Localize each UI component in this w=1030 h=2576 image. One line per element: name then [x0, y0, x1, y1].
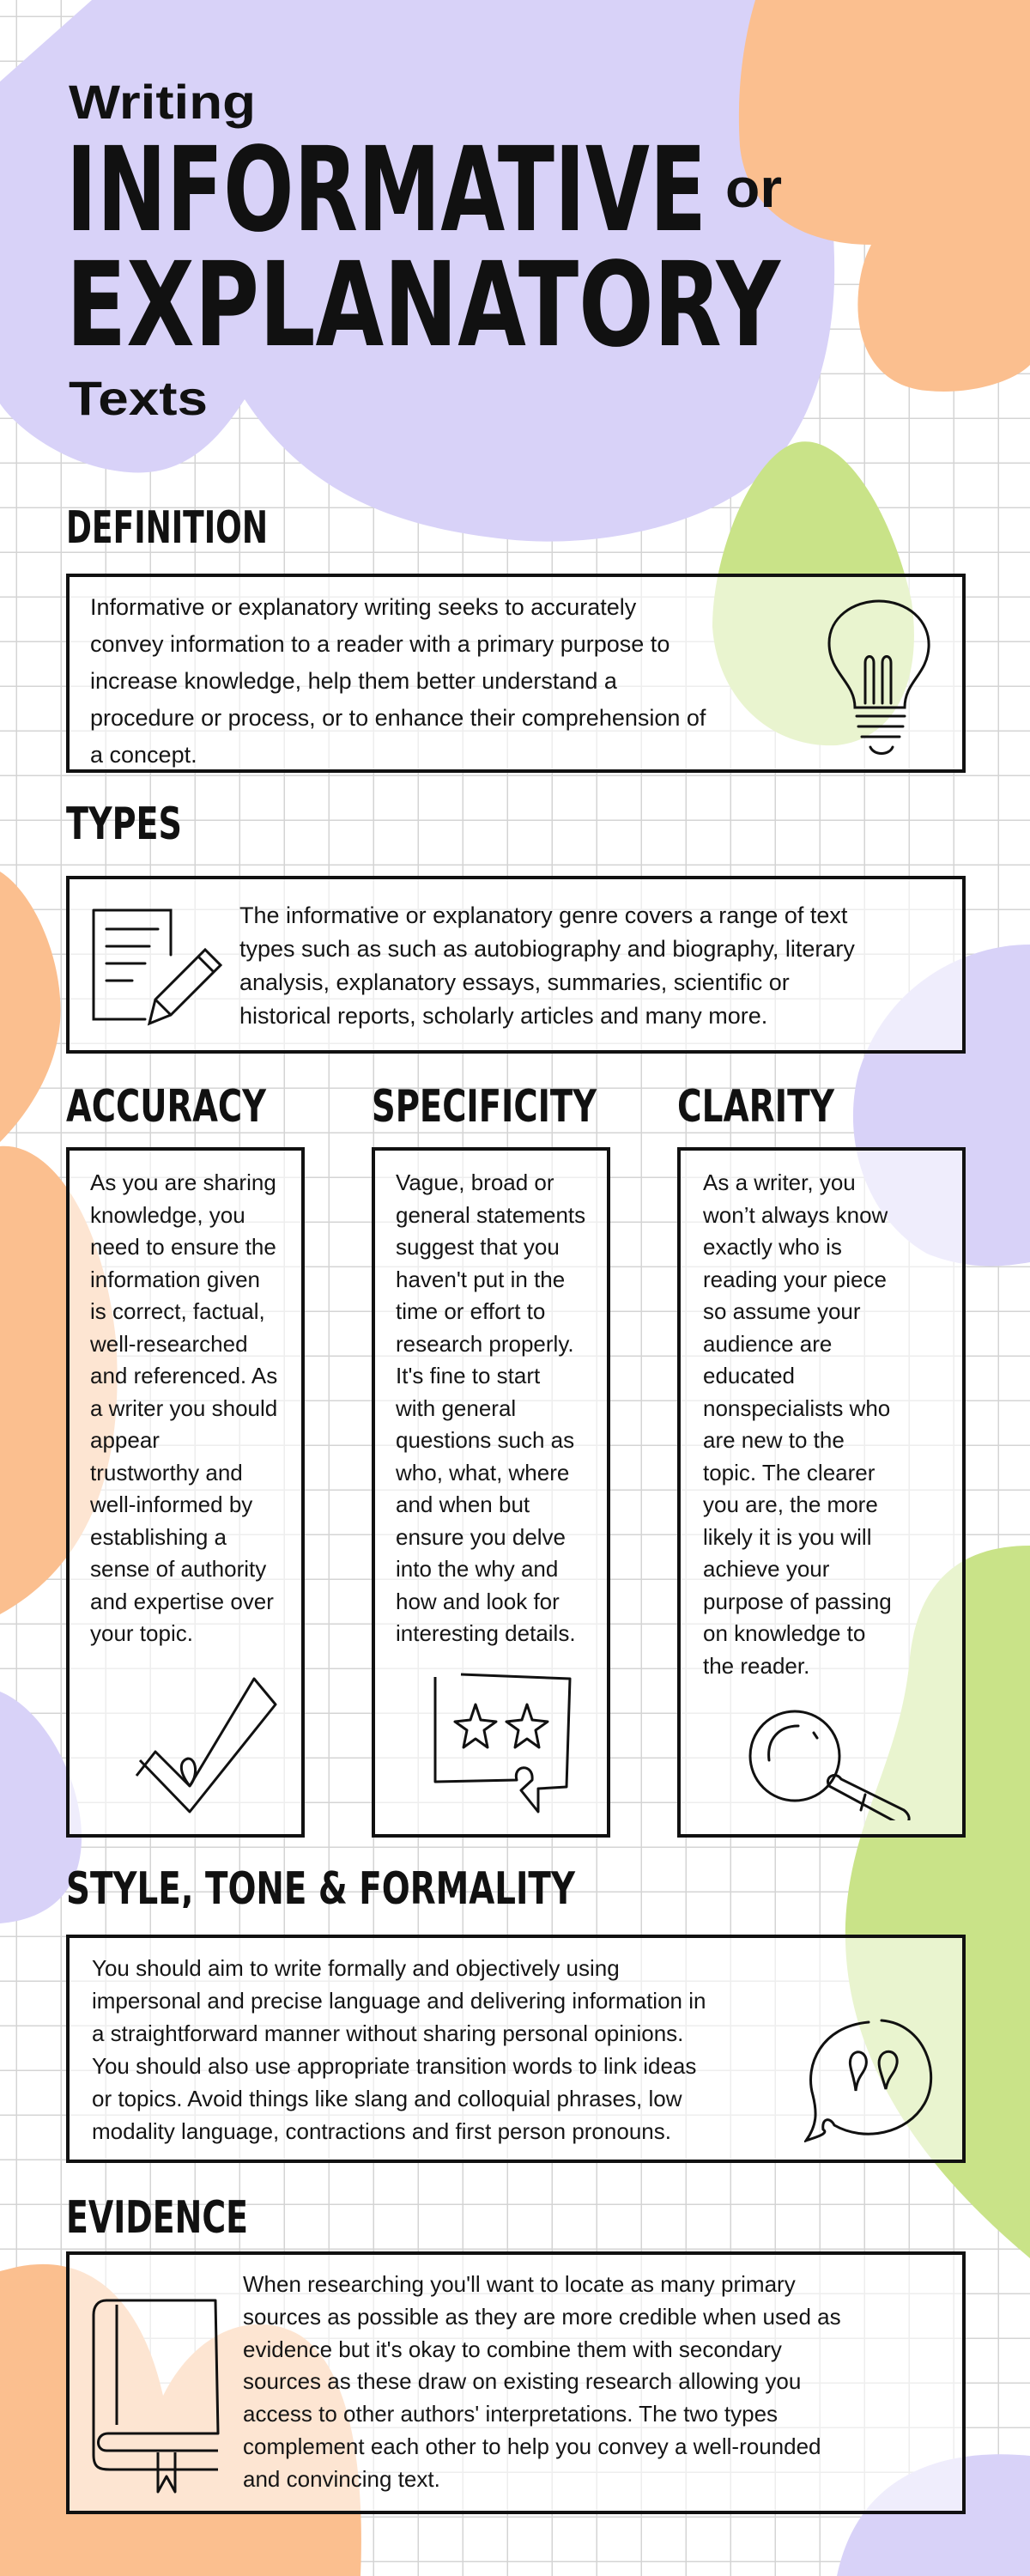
text: specificity [396, 1170, 585, 1646]
text: clarity: exactly who is [703, 1234, 842, 1260]
text: specificity: who, what, where [396, 1460, 569, 1485]
text: clarity: won’t always know [703, 1202, 888, 1228]
text: accuracy: your topic. [90, 1620, 193, 1646]
text: definition [90, 594, 706, 768]
icon: magnifying glass [748, 1710, 911, 1820]
text: specificity: haven't put in the [396, 1266, 565, 1291]
text: definition: procedure or process, or to enhance their comprehension of [90, 705, 706, 731]
text: specificity: general statements [396, 1202, 585, 1228]
text: style: You should also use appropriate transition words to link ideas [92, 2053, 696, 2079]
text: specificity: suggest that you [396, 1234, 560, 1260]
text: clarity: on knowledge to [703, 1620, 865, 1646]
text: types: The informative or explanatory genre covers a range of text [239, 902, 847, 928]
text: evidence: evidence but it's okay to combine them with secondary [243, 2336, 782, 2362]
panel: style [66, 1935, 966, 2163]
text: accuracy: and referenced. As [90, 1363, 277, 1388]
text: specificity: into the why and [396, 1556, 558, 1582]
text: clarity [703, 1170, 892, 1678]
text: accuracy: sense of authority [90, 1556, 266, 1582]
text: clarity: As a writer, you [703, 1170, 856, 1195]
icon: speech bubble with stars [434, 1673, 572, 1814]
text: accuracy [90, 1170, 277, 1646]
text: clarity: achieve your [703, 1556, 829, 1582]
text: specificity: how and look for [396, 1589, 560, 1614]
text: definition: convey information to a reader with a primary purpose to [90, 631, 670, 657]
text: clarity: are new to the [703, 1427, 845, 1453]
text: specificity: research properly. [396, 1331, 574, 1357]
text: evidence: access to other authors' interpretations. The two types [243, 2401, 778, 2427]
title: INFORMATIVE [66, 123, 706, 258]
text: clarity: audience are [703, 1331, 832, 1357]
icon: pencil and paper [93, 908, 222, 1025]
title [66, 75, 782, 425]
text: clarity: reading your piece [703, 1266, 887, 1291]
text: evidence: sources as these draw on existing research allowing you [243, 2368, 801, 2394]
text: evidence [243, 2271, 841, 2492]
text: evidence: sources as possible as they are more credible when used as [243, 2304, 841, 2330]
text: style: or topics. Avoid things like slang and colloquial phrases, low [92, 2086, 682, 2111]
text: accuracy: well-researched [90, 1331, 248, 1357]
text: definition: a concept. [90, 742, 197, 768]
title: or [725, 157, 782, 219]
text: types: types such as such as autobiography and biography, literary [239, 936, 855, 962]
icon: check mark [136, 1677, 276, 1814]
text: accuracy: information given [90, 1266, 260, 1291]
panel: accuracy [66, 1147, 305, 1838]
text: accuracy: establishing a [90, 1523, 227, 1549]
text: clarity: likely it is you will [703, 1523, 872, 1549]
title: Texts [69, 371, 208, 425]
text: specificity: It's fine to start [396, 1363, 540, 1388]
text: evidence: When researching you'll want to locate as many primary [243, 2271, 796, 2297]
text: specificity: interesting details. [396, 1620, 576, 1646]
text: specificity: questions such as [396, 1427, 574, 1453]
text: accuracy: well-informed by [90, 1492, 252, 1517]
panel: specificity [372, 1147, 610, 1838]
text: accuracy: knowledge, you [90, 1202, 245, 1228]
panel: clarity [677, 1147, 966, 1838]
panel: types [66, 876, 966, 1054]
text: clarity: educated [703, 1363, 795, 1388]
text: clarity: you are, the more [703, 1492, 878, 1517]
text: specificity: time or effort to [396, 1298, 545, 1324]
text: types: analysis, explanatory essays, summaries, scientific or [239, 969, 790, 995]
text: clarity: the reader. [703, 1652, 809, 1678]
text: definition: Informative or explanatory writing seeks to accurately [90, 594, 636, 620]
text: types: historical reports, scholarly articles and many more. [239, 1003, 767, 1029]
text: accuracy: As you are sharing [90, 1170, 276, 1195]
text: types [239, 902, 855, 1029]
text: accuracy: appear [90, 1427, 160, 1453]
text: evidence: and convincing text. [243, 2466, 440, 2492]
text: style: a straightforward manner without sharing personal opinions. [92, 2020, 683, 2046]
icon: book [93, 2300, 220, 2494]
text: style [92, 1955, 706, 2144]
text: style: modality language, contractions and first person pronouns. [92, 2118, 671, 2144]
panel: definition [66, 574, 966, 773]
text: clarity: purpose of passing [703, 1589, 892, 1614]
text: accuracy: need to ensure the [90, 1234, 276, 1260]
icon: quote speech bubble [804, 2020, 932, 2142]
title: Writing [69, 75, 256, 129]
text: style: impersonal and precise language and delivering information in [92, 1988, 706, 2014]
text: clarity: nonspecialists who [703, 1394, 890, 1420]
text: accuracy: trustworthy and [90, 1460, 243, 1485]
text: evidence: complement each other to help you convey a well-rounded [243, 2433, 821, 2459]
panel: evidence [66, 2251, 966, 2514]
text: accuracy: a writer you should [90, 1394, 277, 1420]
text: definition: increase knowledge, help them better understand a [90, 668, 617, 694]
text: style: You should aim to write formally and objectively using [92, 1955, 620, 1981]
text: specificity: ensure you delve [396, 1523, 566, 1549]
text: clarity: topic. The clearer [703, 1460, 875, 1485]
text: accuracy: and expertise over [90, 1589, 274, 1614]
text: specificity: and when but [396, 1492, 530, 1517]
text: accuracy: is correct, factual, [90, 1298, 265, 1324]
text: specificity: Vague, broad or [396, 1170, 554, 1195]
icon: light bulb [827, 599, 930, 755]
text: specificity: with general [396, 1394, 516, 1420]
text: clarity: so assume your [703, 1298, 861, 1324]
